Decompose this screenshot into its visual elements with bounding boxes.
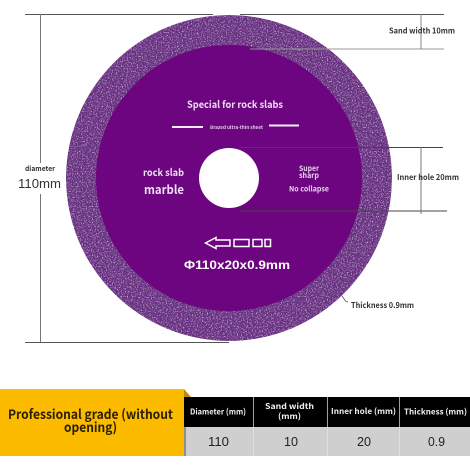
table values [184, 427, 470, 456]
table header: (mm) [278, 411, 301, 422]
subheading with rules: Brazed ultra-thin sheet [210, 124, 263, 131]
table values: 10 [284, 434, 298, 449]
table values: 110 [208, 434, 229, 449]
purple centre [96, 45, 362, 311]
rock slab label: marble [144, 181, 184, 198]
inner hole annotation [240, 147, 459, 214]
heading: Special for rock slabs [187, 96, 283, 111]
thickness annotation [342, 296, 414, 311]
diameter label [18, 164, 61, 191]
icon: direction arrow [206, 238, 270, 248]
centre hole [199, 148, 259, 208]
size text: Φ110x20x0.9mm [184, 258, 290, 272]
feature label: sharp [299, 170, 319, 181]
diameter label: diameter [25, 164, 56, 174]
orange label panel: Professional grade (without [8, 404, 173, 423]
orange label panel: opening) [64, 417, 117, 436]
table header: Thickness (mm) [404, 406, 467, 418]
feature label: No collapse [289, 184, 330, 194]
feature label: Super [299, 163, 320, 174]
table header: Diameter (mm) [190, 406, 246, 418]
subheading with rules [172, 124, 299, 131]
feature label [289, 163, 330, 194]
diameter dimension lines [25, 14, 229, 342]
inner hole annotation: Inner hole 20mm [397, 172, 459, 183]
rock slab label [143, 164, 184, 198]
table values: 0.9 [428, 434, 445, 449]
table header: Sand width [265, 401, 314, 412]
table header: Inner hole (mm) [331, 406, 396, 417]
rock slab label: rock slab [143, 164, 184, 179]
thickness annotation: Thickness 0.9mm [351, 300, 414, 311]
table header [184, 397, 470, 427]
spec table [0, 389, 470, 456]
sand width annotation: Sand width 10mm [389, 26, 455, 36]
diameter label: 110mm [18, 176, 61, 191]
saw blade disc [66, 15, 392, 341]
table values: 20 [357, 434, 371, 449]
orange label panel [0, 389, 191, 456]
abrasive ring [66, 15, 392, 341]
